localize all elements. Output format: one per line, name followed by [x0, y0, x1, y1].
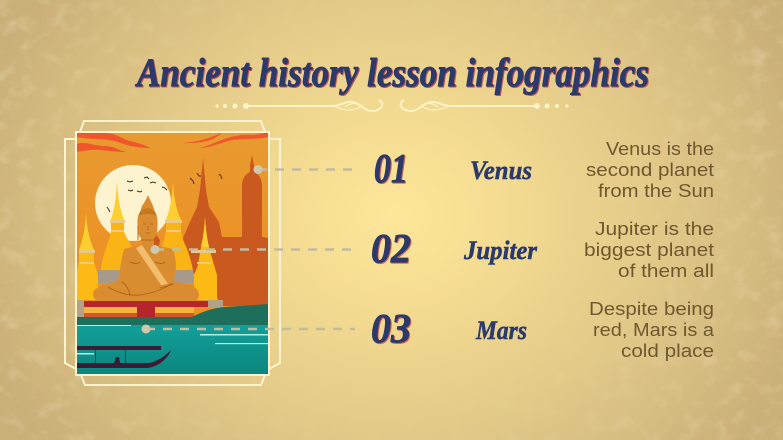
red clouds — [76, 132, 269, 152]
Buddha — [93, 195, 199, 304]
description Venus — [586, 138, 714, 201]
grey terrace — [98, 270, 193, 283]
description Jupiter: of them all — [618, 260, 714, 281]
red platform — [84, 301, 208, 307]
title: Ancient history lesson infographics — [135, 51, 650, 96]
description Mars: Despite being — [589, 298, 714, 319]
label Venus: Venus — [470, 156, 532, 185]
number 03: 03 — [371, 305, 411, 351]
picture border — [76, 132, 269, 375]
number 01: 01 — [374, 145, 408, 191]
illustration: temple and Buddha — [76, 132, 269, 375]
frame around illustration — [65, 121, 280, 385]
title ornament — [215, 100, 569, 111]
water — [76, 325, 269, 375]
description Jupiter: Jupiter is the — [595, 218, 714, 239]
connector line 1 — [254, 165, 355, 174]
birds — [107, 173, 222, 212]
description Mars: red, Mars is a — [593, 319, 715, 340]
title: Ancient history lesson infographics — [134, 50, 649, 95]
connector line 3 — [142, 324, 355, 334]
yellow stupas — [76, 182, 217, 300]
description Venus: from the Sun — [598, 180, 714, 201]
label Mars: Mars — [475, 316, 527, 345]
number 01: 01 — [375, 146, 409, 192]
green land — [77, 304, 268, 325]
connector line 2 — [150, 245, 355, 254]
description Venus: Venus is the — [606, 138, 714, 159]
description Jupiter: biggest planet — [584, 239, 714, 260]
description Jupiter — [584, 218, 714, 281]
description Mars: cold place — [621, 340, 714, 361]
stupa bands — [79, 220, 216, 264]
number 03: 03 — [372, 306, 412, 352]
number 02: 02 — [372, 226, 412, 272]
label Jupiter: Jupiter — [463, 236, 538, 265]
moon — [95, 165, 171, 241]
description Venus: second planet — [586, 159, 714, 180]
number 02: 02 — [371, 225, 411, 271]
boat — [76, 346, 171, 368]
sky — [77, 133, 268, 316]
description Mars — [589, 298, 715, 361]
silhouette temple — [183, 155, 269, 306]
